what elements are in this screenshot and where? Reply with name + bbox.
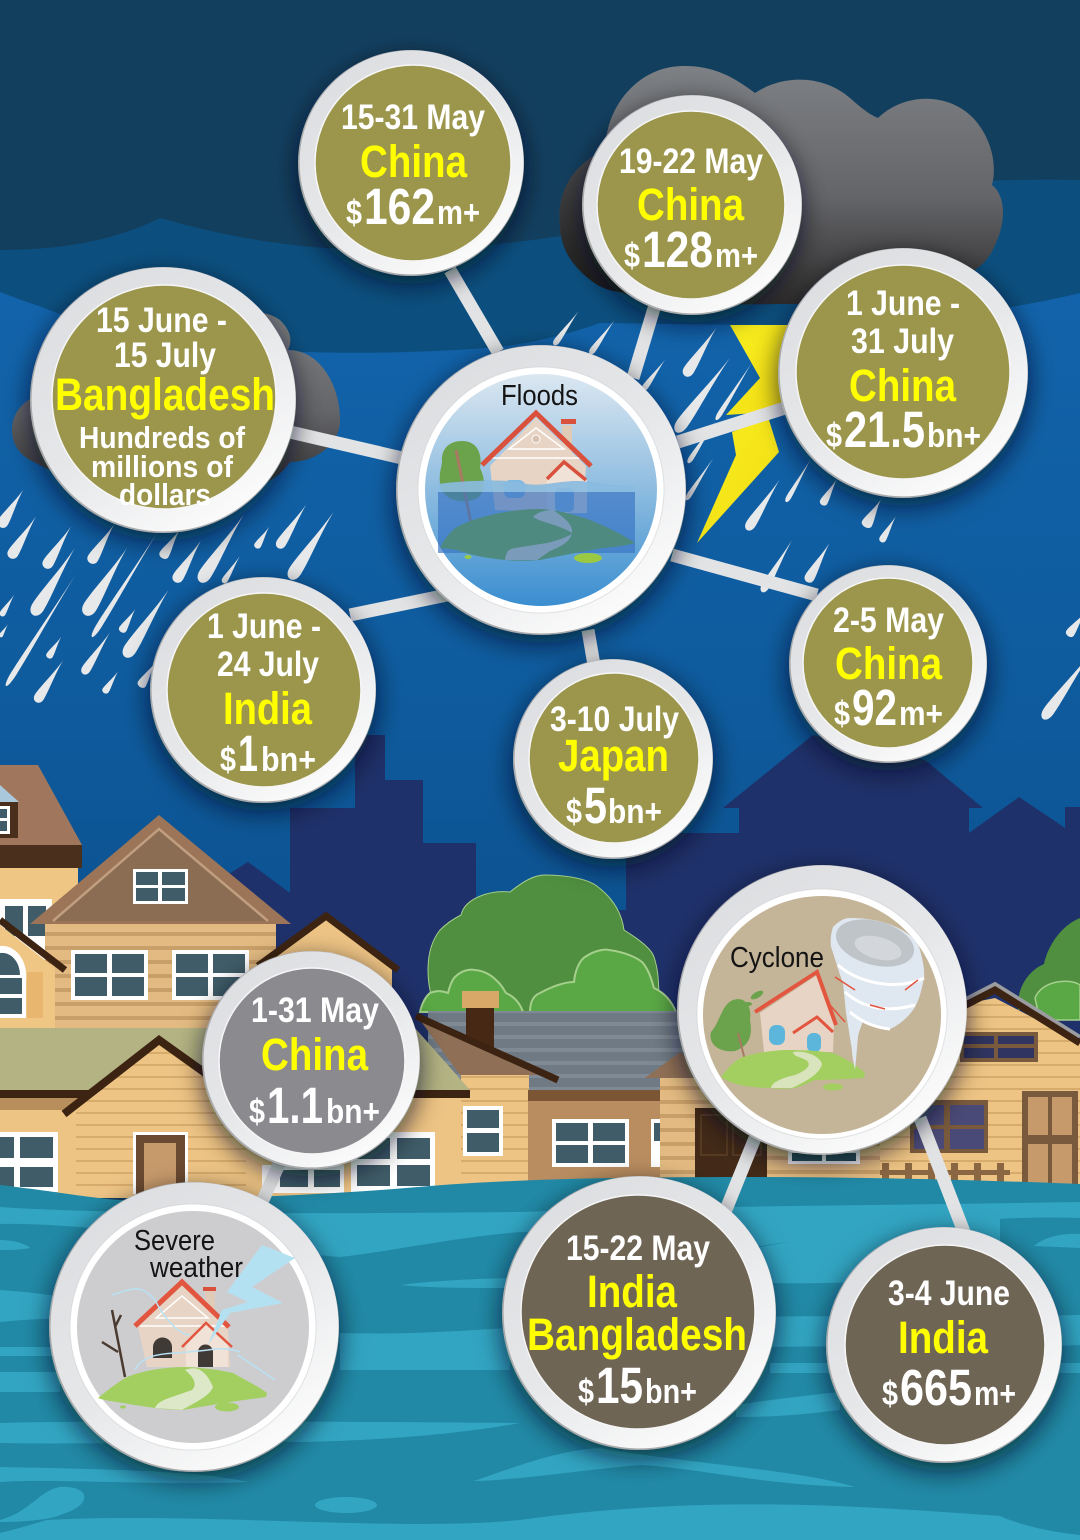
amount: millions of bbox=[91, 449, 234, 484]
amount: m+ bbox=[715, 237, 758, 275]
amount: $ bbox=[826, 417, 842, 455]
amount: 92 bbox=[852, 679, 897, 736]
label: Cyclone bbox=[730, 942, 824, 974]
amount bbox=[249, 1077, 380, 1134]
bubble: 19-22 May China bbox=[582, 95, 802, 315]
amount: bn+ bbox=[608, 793, 662, 831]
country: China bbox=[261, 1029, 369, 1080]
amount: $ bbox=[578, 1373, 594, 1411]
cloud: top right bbox=[559, 66, 1003, 304]
amount: bn+ bbox=[261, 741, 316, 779]
date: 2-5 May bbox=[833, 600, 944, 640]
amount: 21.5 bbox=[844, 401, 925, 458]
skyline silhouette bbox=[224, 735, 1080, 1100]
amount: $ bbox=[220, 741, 236, 779]
amount: $ bbox=[882, 1375, 898, 1413]
amount: 1.1 bbox=[267, 1077, 323, 1134]
house: right bbox=[880, 981, 1080, 1191]
bubble: 1 June - 24 July India bbox=[150, 577, 376, 803]
bubble: 2-5 May China bbox=[789, 565, 987, 763]
date: 15 July bbox=[114, 335, 216, 375]
amount: 665 bbox=[900, 1359, 972, 1416]
icon: tornado and house bbox=[710, 911, 924, 1090]
label: Severe bbox=[134, 1225, 215, 1257]
icon: lightning-struck house bbox=[98, 1245, 295, 1412]
date: 1-31 May bbox=[251, 990, 379, 1030]
icon: flooded house bbox=[438, 413, 635, 563]
hub: Floods bbox=[396, 345, 686, 635]
date: 15 June - bbox=[96, 300, 227, 340]
label: weather bbox=[149, 1252, 243, 1284]
amount bbox=[826, 401, 981, 458]
amount bbox=[834, 679, 943, 736]
house: large gabled bbox=[30, 815, 291, 1033]
bubble: 15-31 May China bbox=[298, 50, 524, 276]
country: India bbox=[898, 1312, 989, 1363]
date: 3-10 July bbox=[550, 699, 679, 739]
hub: Cyclone bbox=[677, 865, 967, 1155]
amount bbox=[882, 1359, 1016, 1416]
flood water bbox=[0, 1177, 1080, 1540]
amount bbox=[624, 221, 758, 278]
amount: bn+ bbox=[927, 417, 981, 455]
date: 15-31 May bbox=[341, 97, 485, 137]
bubble: 1-31 May China bbox=[202, 951, 420, 1169]
country: China bbox=[835, 638, 943, 689]
hub: Severe weather bbox=[49, 1182, 339, 1472]
date bbox=[207, 606, 321, 684]
bubble: 1 June - 31 July China bbox=[778, 248, 1028, 498]
date bbox=[96, 300, 227, 375]
amount bbox=[566, 777, 662, 834]
amount: 1 bbox=[238, 725, 258, 782]
house: centre right bbox=[645, 1052, 880, 1188]
date: 31 July bbox=[851, 321, 954, 361]
amount: bn+ bbox=[645, 1373, 697, 1411]
amount bbox=[578, 1357, 697, 1414]
tree: right bbox=[1018, 918, 1080, 1010]
country bbox=[527, 1266, 747, 1360]
label: Floods bbox=[501, 380, 578, 412]
country: China bbox=[637, 179, 745, 230]
bubble: 15-22 May India Bangladesh bbox=[502, 1176, 776, 1450]
amount: Hundreds of bbox=[79, 420, 246, 455]
amount: $ bbox=[566, 793, 582, 831]
icon: lightning bolt bbox=[697, 325, 800, 543]
trees: centre bbox=[420, 875, 676, 1012]
amount: 5 bbox=[584, 777, 607, 834]
rain: left group bbox=[0, 487, 339, 705]
country: India bbox=[587, 1266, 678, 1317]
neighbourhood houses bbox=[0, 765, 1080, 1198]
label bbox=[134, 1225, 243, 1284]
date: 15-22 May bbox=[566, 1228, 710, 1268]
country: Japan bbox=[558, 730, 669, 781]
country: China bbox=[360, 136, 468, 187]
amount: $ bbox=[624, 237, 640, 275]
date: 1 June - bbox=[207, 606, 321, 646]
house: left small gable bbox=[0, 920, 65, 1030]
amount: $ bbox=[346, 194, 362, 232]
date: 19-22 May bbox=[619, 141, 763, 181]
amount bbox=[346, 178, 480, 235]
country: China bbox=[849, 360, 957, 411]
rain: right group bbox=[552, 309, 1080, 722]
date bbox=[846, 283, 960, 361]
amount: m+ bbox=[437, 194, 480, 232]
date: 3-4 June bbox=[888, 1273, 1010, 1313]
country: India bbox=[223, 683, 313, 734]
amount: m+ bbox=[899, 695, 943, 733]
roof and ground floor: left row bbox=[0, 1028, 470, 1198]
cloud: left bbox=[12, 311, 340, 495]
bubble: 15 June - 15 July Bangladesh bbox=[30, 267, 296, 533]
house: rear small gable bbox=[258, 913, 398, 1040]
bubble: 3-4 June India bbox=[826, 1227, 1062, 1463]
connectors bbox=[262, 270, 964, 1232]
bubble: 3-10 July Japan bbox=[513, 659, 713, 859]
amount: dollars bbox=[119, 477, 211, 512]
date: 1 June - bbox=[846, 283, 960, 323]
country: Bangladesh bbox=[55, 369, 275, 420]
amount: $ bbox=[834, 695, 850, 733]
amount bbox=[220, 725, 316, 782]
amount: 128 bbox=[642, 221, 713, 278]
amount: $ bbox=[249, 1093, 265, 1131]
house: far left upper bbox=[0, 765, 82, 1038]
date: 24 July bbox=[217, 644, 319, 684]
amount bbox=[79, 420, 246, 512]
amount: 15 bbox=[596, 1357, 643, 1414]
country: Bangladesh bbox=[527, 1309, 747, 1360]
amount: bn+ bbox=[326, 1093, 380, 1131]
amount: 162 bbox=[364, 178, 435, 235]
house: centre grey roof bbox=[416, 991, 683, 1190]
amount: m+ bbox=[974, 1375, 1016, 1413]
